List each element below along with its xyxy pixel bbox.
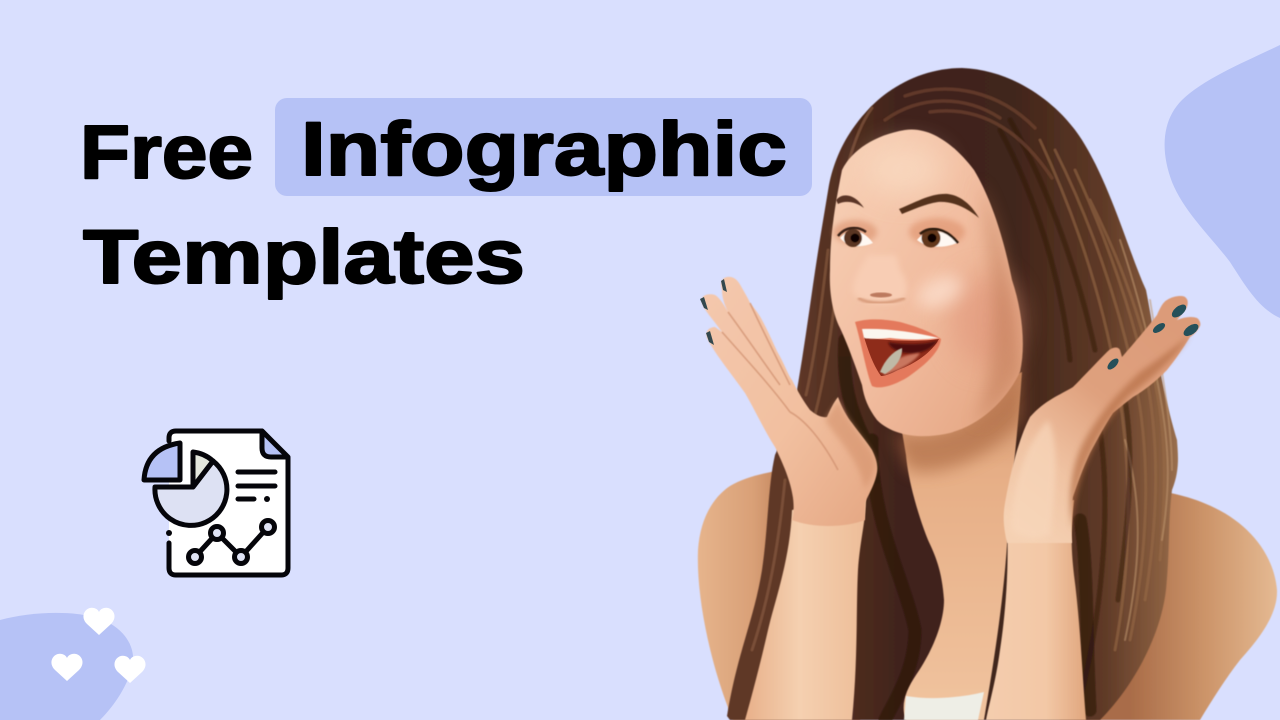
nostril: [870, 292, 892, 298]
left hand creases: [722, 303, 838, 470]
pie slice: detached: [144, 443, 180, 480]
icon: heart right: [114, 656, 146, 683]
left eye: [838, 228, 873, 247]
nose: [853, 255, 907, 304]
nose underside: [858, 298, 905, 303]
lips: [855, 319, 941, 387]
face: [830, 129, 1023, 436]
dots: [166, 496, 270, 536]
strands: lower dark: [844, 340, 1090, 720]
document sheet: [169, 420, 288, 575]
lower teeth: [880, 348, 902, 374]
line chart: [195, 527, 268, 557]
photo: excited woman: [698, 68, 1277, 720]
face highlight: [912, 269, 968, 315]
icon: heart top: [83, 608, 115, 635]
right hand: [1004, 296, 1200, 543]
neck shadow: [893, 370, 1022, 472]
heading word: Templates: Templates: [83, 215, 525, 300]
left forearm: [745, 498, 866, 720]
strands: right dark: [1000, 120, 1130, 700]
chart points: [188, 520, 274, 564]
strands: right warm: [1040, 140, 1164, 650]
text lines: [238, 472, 275, 499]
right eyebrow: [899, 194, 979, 218]
hair strands: [752, 89, 1172, 720]
left shoulder: [698, 468, 860, 720]
hearts: [51, 608, 146, 683]
blob: bottom left: [0, 613, 133, 720]
cheek blush: [951, 275, 1019, 365]
document outline: [169, 431, 288, 575]
heading word: Infographic: Infographic: [301, 107, 787, 192]
title: [80, 98, 812, 300]
neck and chest: [900, 372, 1022, 720]
pie slice: large: [155, 461, 227, 525]
icon: heart left: [51, 654, 83, 681]
page fold: [262, 431, 288, 457]
teeth: [862, 329, 939, 340]
icon: report document: [144, 420, 288, 575]
right shoulder: [1060, 488, 1277, 720]
blob: top right: [1165, 45, 1280, 318]
eye shadow left: [833, 220, 877, 244]
tongue: [884, 353, 920, 375]
mouth interior: [864, 337, 939, 376]
nose shading: [853, 255, 907, 304]
nail: left hand: [700, 279, 727, 345]
right hand light side: [1012, 420, 1055, 538]
right forearm: [986, 500, 1086, 720]
mouth throat: [888, 340, 938, 354]
strands: crown: [885, 89, 1052, 178]
strands: left warm: [752, 108, 872, 650]
nail: right hand: [1106, 302, 1201, 371]
hair mass: [727, 68, 1178, 720]
highlight box: [275, 98, 812, 196]
heading word: Free: Free: [80, 110, 253, 195]
pie slice: small: [193, 452, 213, 487]
strands: right pale: [1120, 240, 1172, 640]
white top: [904, 692, 984, 720]
left hand: [702, 277, 877, 526]
right hand underside shade: [1070, 335, 1190, 530]
right face shade: [975, 180, 1022, 425]
eye shadow right: [909, 218, 965, 246]
right eye: [917, 228, 958, 248]
forehead light: [865, 145, 945, 195]
left eyebrow: [836, 195, 864, 208]
left hand thumb shade: [825, 400, 876, 490]
